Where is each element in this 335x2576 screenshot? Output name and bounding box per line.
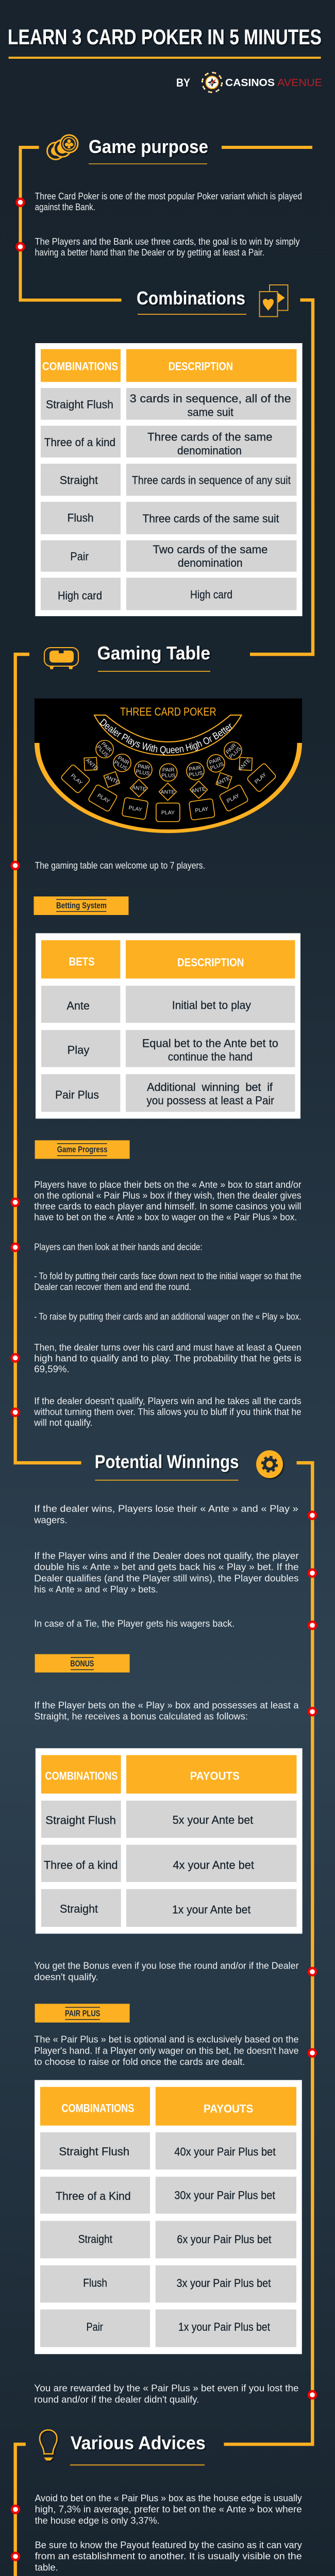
row: three of a kind: 4x your Ante bet [173,1858,254,1871]
row: straight: Straight [60,473,98,486]
play labels: PLAY [254,772,267,785]
text: goal of the game: having a better hand than the Dealer or by getting at least a Pair. [35,247,264,258]
connector line: gaming table [15,654,81,1463]
text: fold: Dealer can recover them and end the round. [34,1282,191,1292]
row: pair plus [41,1074,295,1112]
row: straight flush: Straight Flush [45,1814,116,1827]
row: straight: Straight [60,1902,98,1915]
pair plus labels: PAIR [116,755,130,767]
timeline dot [12,862,19,869]
timeline dot [309,2391,316,2398]
row: three of a kind [41,426,297,457]
icon: playing cards [260,285,288,316]
text: know the payout: Be sure to know the Payout featured by the casino as it can vary [35,2540,302,2550]
row: flush: Three cards of the same suit [142,512,279,525]
text: dealer does not qualify: will not qualify. [34,1417,93,1428]
table header: PAYOUTS [204,2103,253,2115]
label: bonus [35,1654,130,1672]
text: bonus rule: If the Player bets on the « Play » box and possesses at least a [34,1700,299,1710]
icon: gear [256,1450,283,1478]
section heading: various advices [40,2430,206,2466]
table header [41,940,295,978]
poker table illustration: THREE CARD POKER [120,705,216,718]
play labels: PLAY [195,806,209,814]
row: pair plus: Pair Plus [55,1088,99,1101]
table header [41,349,297,382]
row: pair: denomination [178,556,243,569]
pair plus labels: PLUS [188,770,203,778]
connector line: combinations [250,300,313,654]
section heading: gaming table [44,642,210,672]
play labels: PLAY [128,805,142,813]
label: pair plus [35,2004,130,2023]
text: player wins: his « Ante » and « Play » bets. [34,1584,158,1595]
row: flush: 3x your Pair Plus bet [176,2277,271,2290]
table header: COMBINATIONS [42,360,118,372]
icon: gaming table [44,648,78,669]
play labels: PLAY [96,792,111,805]
poker table illustration [35,699,302,833]
header brand: by Casinos Avenue [176,72,322,93]
section heading: various advices: Various Advices [71,2432,206,2453]
text: game purpose intro: against the Bank. [35,202,95,212]
panel: bets table [36,933,300,1118]
table header: COMBINATIONS [61,2102,134,2114]
timeline dot [12,2553,19,2560]
betting spots: pair plus [96,740,242,781]
text: dealer does not qualify [34,1396,301,1428]
dealer rule band: Dealer Plays With Queen High Or Better [99,718,232,755]
table header: BETS [69,955,95,968]
row: pair plus: you possess at least a Pair [146,1094,274,1107]
icon: casino chip logo small [202,72,223,93]
row: ante: Initial bet to play [172,999,251,1012]
panel: combinations table [35,343,303,616]
row: pair: Pair [70,550,89,563]
row: three of a kind: denomination [177,444,242,457]
section heading: potential winnings: Potential Winnings [95,1451,239,1472]
betting spots: ante [84,757,252,801]
text: pair plus rule: Player's hand. If a Player only wager on this bet, he doesn't have [34,2045,299,2056]
row: play: Equal bet to the Ante bet to [142,1037,278,1049]
betting spots: play [60,763,277,822]
text: placing bets: Players have to place their bets on the « Ante » box to start and/or [34,1180,301,1190]
ante labels: ANTE [85,757,99,772]
ante labels [85,757,252,795]
row: pair [41,540,297,572]
play labels [70,772,267,816]
text: fold [34,1271,301,1292]
text: bonus rule [34,1700,299,1722]
row: straight flush: 3 cards in sequence, all of the [130,392,291,405]
play labels: PLAY [226,792,241,804]
text: placing bets: have to bet on the « Ante » box to wager on the « Pair Plus » box. [34,1212,297,1223]
timeline dot [309,1622,316,1629]
table header: COMBINATIONS [45,1770,118,1783]
row: ante: Ante [66,999,90,1012]
timeline dot [309,2049,316,2057]
text: bonus note [34,1960,299,1982]
row: straight: 6x your Pair Plus bet [177,2233,271,2246]
pair plus labels: PLUS [135,769,150,777]
text: bonus note: You get the Bonus even if you lose the round and/or if the Dealer [34,1960,299,1971]
label: game progress: Game Progress [57,1145,107,1155]
text: pair plus rule: The « Pair Plus » bet is optional and is exclusively based on the [34,2035,299,2045]
label: game progress [35,1140,130,1159]
text: pair plus note [34,2383,299,2404]
row: straight flush [41,1801,297,1838]
text: fold: - To fold by putting their cards face down next to the initial wager so that the [34,1271,301,1281]
label: betting system [34,896,129,915]
timeline dot [309,1569,316,1577]
row: three of a kind [41,1845,297,1882]
label: bonus: BONUS [70,1658,94,1668]
icon: light bulb [40,2430,57,2461]
timeline dot [12,1409,19,1416]
text: goal of the game [35,236,300,258]
table header: PAYOUTS [190,1770,240,1783]
section heading: combinations [137,285,288,316]
pair plus labels: PLUS [209,761,225,772]
label: betting system: Betting System [56,901,107,910]
text: dealer does not qualify: without turning them over. This allows you to bluff if you think that he [34,1406,301,1417]
row: high card [41,578,297,610]
text: know the payout [35,2540,302,2572]
panel: bonus payouts table [36,1748,303,1934]
row: straight flush [40,2132,296,2170]
row: straight: 1x your Ante bet [172,1903,250,1916]
header brand: by Casinos Avenue: BY [176,76,190,89]
text: dealer qualification: high hand to qualify and to play. The probability that he gets is [34,1353,301,1364]
row: straight [41,464,297,496]
row: high card: High card [58,589,102,602]
row: flush [40,2265,296,2302]
ante labels: ANTE [238,757,252,772]
text: avoid pair plus [35,2493,302,2526]
row: play: Play [68,1044,89,1057]
text: dealer wins [34,1504,298,1526]
pair plus labels: PAIR [100,741,113,754]
connector line: potential winnings [224,1463,312,2444]
text: pair plus rule: to choose to raise or fold once the cards are dealt. [34,2057,245,2067]
pair plus labels: PLUS [95,744,110,758]
section heading: combinations: Combinations [137,287,245,309]
text: player wins: Dealer qualifies (and the Player still wins), the Player doubles [34,1573,299,1583]
timeline dot [309,1708,316,1715]
text: tie: In case of a Tie, the Player gets his wagers back. [34,1619,234,1629]
text: game purpose intro [35,191,302,212]
text: bonus rule: Straight, he receives a bonus calculated as follows: [34,1711,248,1722]
text: know the payout: from an establishment to another. It is usually visible on the [35,2551,302,2562]
pair plus labels: PAIR [137,763,150,771]
text: player wins: double his « Ante » bet and gets back his « Play » bet. If the [34,1562,299,1572]
label: pair plus: PAIR PLUS [65,2008,100,2018]
timeline dot [309,1512,316,1519]
section heading: potential winnings [95,1450,283,1481]
row: straight: Straight [78,2232,112,2245]
table header: DESCRIPTION [177,956,244,969]
row: straight [40,2221,296,2258]
text: dealer does not qualify: If the dealer doesn't qualify, Players win and he takes all the cards [34,1396,301,1406]
text: avoid pair plus: high, 7,3% in average, prefer to bet on the « Ante » box where [35,2504,302,2515]
timeline dot [12,1354,19,1362]
row: three of a kind: Three of a Kind [56,2190,131,2202]
pair plus labels: PAIR [225,742,238,755]
row: pair plus: Additional winning bet if [147,1080,273,1093]
row: straight flush: same suit [188,406,233,419]
panel: pair plus payouts table [35,2080,302,2354]
section heading: game purpose [47,135,208,164]
row: pair: Two cards of the same [153,543,268,556]
row: three of a kind: Three of a kind [44,436,115,449]
text: dealer wins: wagers. [34,1515,68,1526]
icon: poker chips [47,135,78,160]
pair plus labels [95,740,242,778]
row: straight flush: 5x your Ante bet [173,1814,253,1826]
text: placing bets [34,1180,301,1223]
connector line: various advices [15,2444,302,2576]
table header [41,1755,297,1793]
table header: DESCRIPTION [169,360,233,372]
table header [40,2087,296,2126]
text: dealer qualification [34,1343,301,1375]
timeline dot [12,2506,19,2513]
timeline dot [309,1968,316,1975]
pair plus labels: PLUS [161,772,175,778]
ante labels: ANTE [131,785,147,792]
row: straight flush [41,388,297,420]
row: flush: Flush [68,512,94,524]
text: placing bets: three cards to each player and himself. In some casinos you will [34,1201,301,1212]
row: flush: Flush [83,2276,107,2289]
ante labels: ANTE [160,789,175,795]
pair plus labels: PAIR [189,765,202,772]
row: pair [40,2310,296,2347]
row: three of a kind: Three of a kind [44,1858,118,1871]
pair plus labels: PLUS [113,759,128,772]
timeline dot [12,1244,19,1251]
row: pair: Pair [87,2320,103,2333]
text: bonus note: doesn't qualify. [34,1972,98,1982]
header brand: by Casinos Avenue: AVENUE [277,77,322,89]
row: straight flush: 40x your Pair Plus bet [174,2145,276,2158]
row: high card: High card [190,588,232,601]
header brand: by Casinos Avenue: CASINOS [225,77,275,89]
ante labels: ANTE [105,774,120,786]
text: pair plus rule [34,2035,299,2067]
section heading: gaming table: Gaming Table [97,642,210,664]
connector line: game purpose [21,147,122,300]
row: play [41,1030,295,1067]
row: three of a kind [40,2177,296,2214]
text: player wins: If the Player wins and if the Dealer does not qualify, the player [34,1551,299,1561]
play labels: PLAY [70,773,83,786]
row: play: continue the hand [168,1050,253,1063]
row: three of a kind: Three cards of the same [147,431,273,444]
row: straight flush: Straight Flush [46,398,113,411]
row: straight: Three cards in sequence of any suit [132,473,291,486]
timeline dot [12,1199,19,1206]
text: game purpose intro: Three Card Poker is one of the most popular Poker variant which is played [35,191,302,201]
pair plus labels: PAIR [208,756,222,766]
pair plus labels: PAIR [162,767,175,773]
text: player wins [34,1551,299,1595]
section heading: game purpose: Game purpose [89,136,208,157]
timeline dot [16,243,24,250]
text: dealer wins: If the dealer wins, Players lose their « Ante » and « Play » [34,1504,298,1514]
row: flush [41,502,297,534]
row: straight [41,1889,297,1927]
text: goal of the game: The Players and the Bank use three cards, the goal is to win by simply [35,236,300,247]
text: dealer qualification: Then, the dealer turns over his card and must have at least a Queen [34,1343,301,1353]
text: know the payout: table. [35,2562,58,2572]
text: avoid pair plus: Avoid to bet on the « Pair Plus » box as the house edge is usually [35,2493,302,2503]
pair plus labels: PLUS [228,745,242,760]
text: pair plus note: round and/or if the dealer didn't qualify. [34,2394,199,2404]
row: pair: 1x your Pair Plus bet [178,2320,270,2333]
row: ante [41,986,295,1023]
text: dealer qualification: 69,59%. [34,1364,70,1375]
ante labels: ANTE [215,775,231,787]
text: table capacity: The gaming table can welcome up to 7 players. [35,860,205,871]
timeline dot [16,199,24,206]
ante labels: ANTE [191,786,206,794]
text: decide: Players can then look at their hands and decide: [34,1242,203,1252]
text: pair plus note: You are rewarded by the « Pair Plus » bet even if you lost the [34,2383,299,2394]
play labels: PLAY [161,810,175,816]
text: avoid pair plus: the house edge is only 3,37%. [35,2515,160,2526]
row: three of a kind: 30x your Pair Plus bet [174,2189,275,2201]
row: straight flush: Straight Flush [59,2145,129,2158]
text: placing bets: on the optional « Pair Plus » box if they wish, then the dealer gives [34,1191,301,1201]
